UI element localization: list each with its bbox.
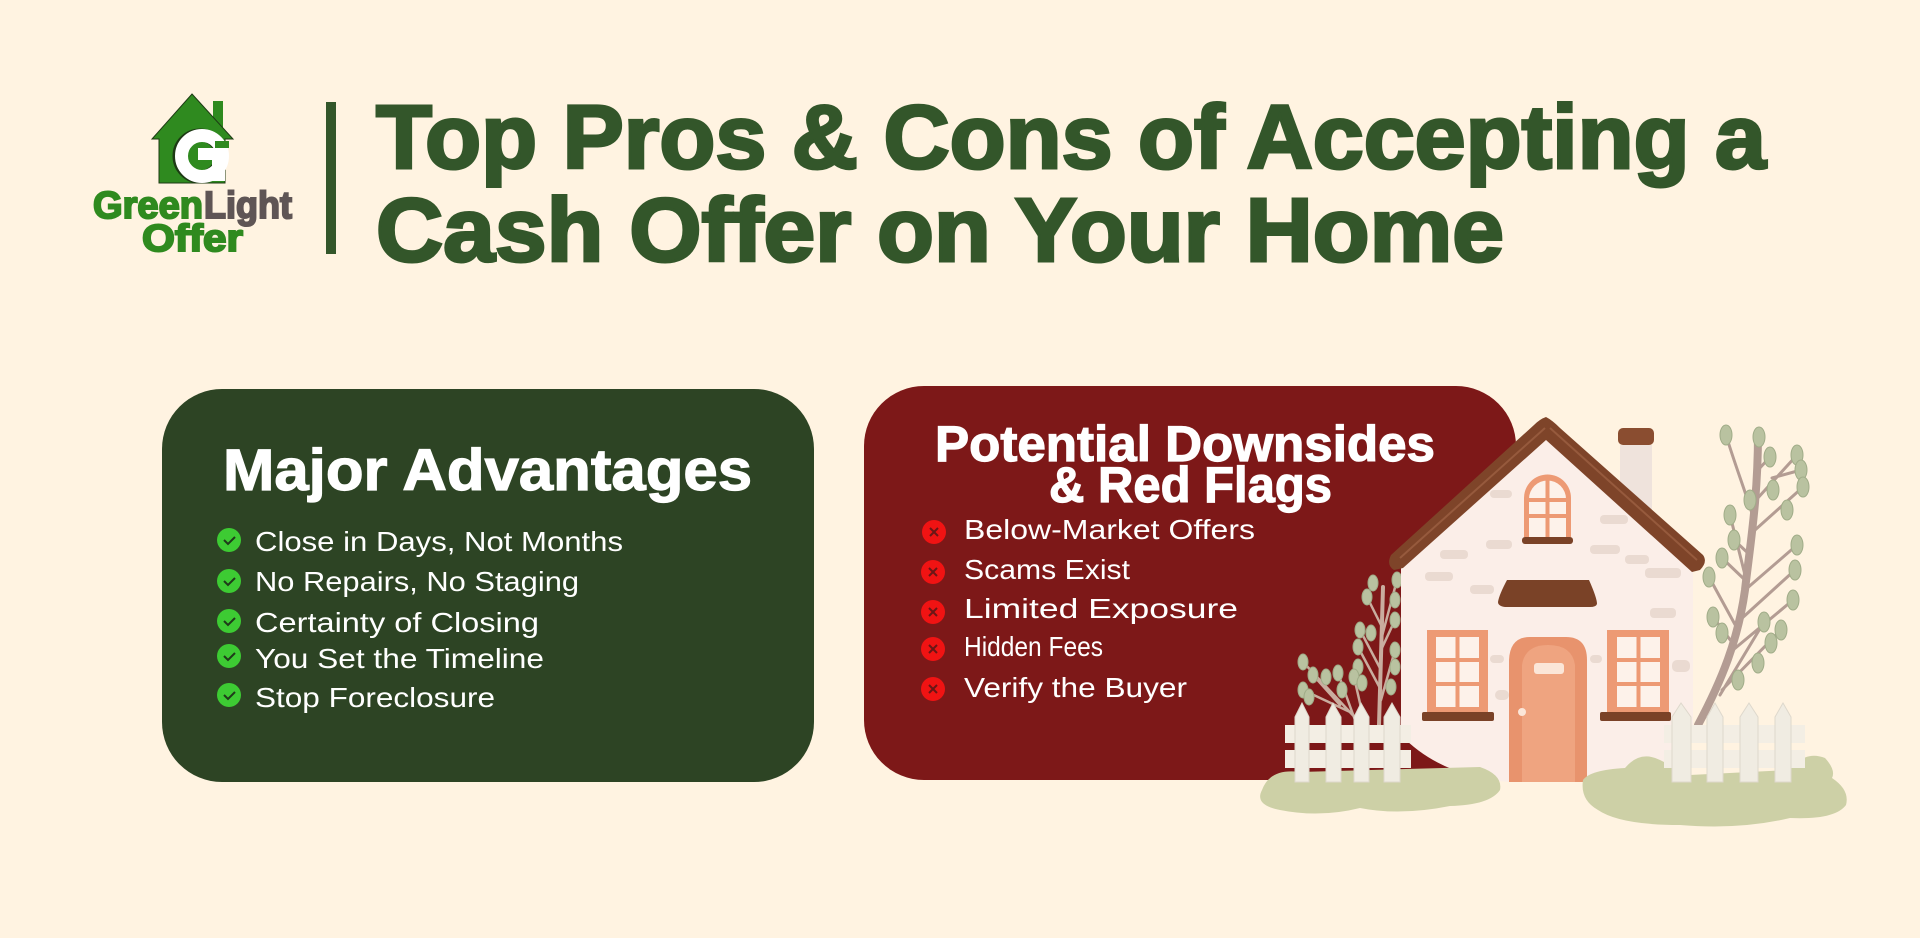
title: Cash Offer on Your Home <box>376 181 1504 281</box>
header divider <box>326 102 336 254</box>
downside: scams exist: Scams Exist <box>964 554 1130 585</box>
illustration: watercolor house <box>1260 417 1847 826</box>
logo wordmark: Offer <box>142 218 243 260</box>
right bush <box>1583 756 1847 826</box>
heading: potential downsides and red flags: Potential Downsides <box>935 416 1435 472</box>
title: Top Pros & Cons of Accepting a <box>376 88 1767 188</box>
door <box>1509 637 1587 782</box>
logo wordmark: Green <box>93 185 203 227</box>
advantage: no repairs: No Repairs, No Staging <box>255 566 579 597</box>
attic window <box>1522 474 1573 544</box>
downside: hidden fees: Hidden Fees <box>964 631 1103 662</box>
panel: major advantages <box>162 389 814 782</box>
heading: potential downsides and red flags: & Red Flags <box>1049 457 1332 513</box>
tree left <box>1298 572 1402 725</box>
advantage: you set the timeline: You Set the Timeline <box>255 643 544 674</box>
downside: below-market offers: Below-Market Offers <box>964 514 1255 545</box>
downside: verify the buyer: Verify the Buyer <box>964 672 1187 703</box>
tree right <box>1698 425 1809 725</box>
awning <box>1498 580 1597 607</box>
logo: GreenLight Offer <box>93 94 292 260</box>
chimney <box>1618 428 1654 515</box>
advantage: close in days: Close in Days, Not Months <box>255 526 623 557</box>
advantage: stop foreclosure: Stop Foreclosure <box>255 682 495 713</box>
title <box>376 88 1767 281</box>
heading: major advantages: Major Advantages <box>223 438 752 503</box>
icon: green house with G <box>152 94 233 183</box>
left fence <box>1285 703 1411 782</box>
roof <box>1389 417 1705 572</box>
panel: potential downsides <box>864 386 1516 780</box>
advantage: certainty of closing: Certainty of Closing <box>255 607 539 638</box>
left window <box>1422 630 1494 721</box>
downside: limited exposure: Limited Exposure <box>964 593 1238 624</box>
right window <box>1600 630 1671 721</box>
wall bricks <box>1425 490 1690 700</box>
house wall <box>1401 436 1693 782</box>
logo wordmark <box>93 185 292 260</box>
left bush <box>1260 767 1500 814</box>
downside: limited exposure <box>921 593 1238 624</box>
logo wordmark: Light <box>204 185 292 227</box>
right fence <box>1664 703 1805 782</box>
downside: hidden fees <box>921 631 1103 662</box>
heading: potential downsides and red flags <box>935 416 1435 513</box>
